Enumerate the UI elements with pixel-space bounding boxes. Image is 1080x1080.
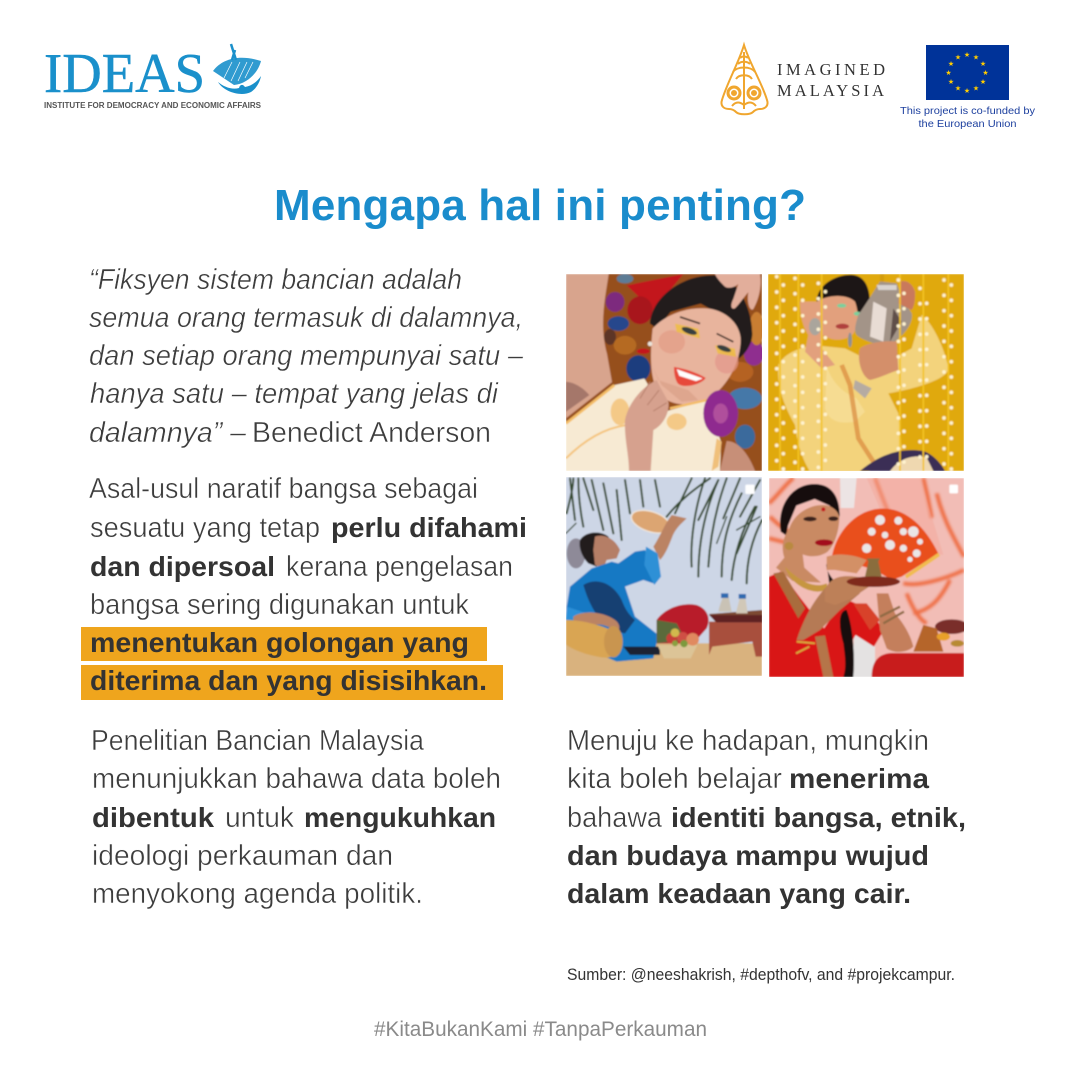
text block: national narrative: Asal-usul naratif bangsa sebagai — [89, 473, 478, 505]
neck and necklace — [785, 567, 827, 592]
text block: quote: semua orang termasuk di dalamnya, — [89, 302, 523, 334]
red sari — [769, 572, 884, 677]
skirt — [860, 450, 945, 471]
text block: census research: menyokong agenda politik. — [92, 878, 423, 910]
logo: Imagined Malaysia: MALAYSIA — [777, 81, 884, 100]
icon: EU stars: ★ — [980, 60, 986, 68]
icon: EU stars: ★ — [973, 84, 979, 92]
photo: woman in red with paper fan — [769, 478, 964, 677]
silver pot — [855, 282, 912, 345]
icon: EU stars: ★ — [980, 78, 986, 86]
icon: EU stars: ★ — [964, 87, 970, 95]
logo: EU flag with co-funding note — [900, 45, 1036, 130]
hand and lamp — [827, 554, 867, 573]
text block: national narrative — [81, 473, 527, 700]
flower in hair — [567, 538, 585, 568]
highlight: line one — [81, 627, 487, 661]
kebaya — [778, 315, 948, 472]
text block: census research: ideologi perkauman dan — [92, 840, 393, 872]
text block: census research: mengukuhkan — [304, 802, 496, 833]
hand on hair — [715, 274, 761, 310]
logo: Imagined Malaysia — [721, 45, 885, 114]
face — [776, 505, 839, 583]
icon: EU stars: ★ — [948, 60, 954, 68]
table and offerings — [872, 653, 964, 677]
icon: EU stars: ★ — [982, 69, 989, 77]
arm and hands — [859, 341, 898, 380]
photo: woman in blue with palm fronds — [566, 477, 762, 676]
icon: EU stars: ★ — [964, 51, 970, 59]
text block: moving forward: identiti bangsa, etnik, — [671, 802, 966, 833]
text block: quote: dalamnya” – — [89, 417, 247, 449]
photo: woman in cheongsam on batik — [566, 274, 762, 471]
text block: national narrative: dan dipersoal — [90, 551, 275, 582]
braid — [826, 563, 854, 677]
icon: EU stars — [945, 51, 989, 95]
text block: census research: untuk — [225, 802, 295, 834]
text block: national narrative: bangsa sering digunakan untuk — [90, 589, 470, 621]
hair — [650, 275, 752, 359]
text block: quote: dan setiap orang mempunyai satu – — [89, 340, 524, 372]
icon: EU stars: ★ — [955, 84, 961, 92]
text block: census research — [91, 725, 501, 910]
blue dress — [567, 550, 658, 662]
fruit basket — [657, 645, 697, 658]
text block: quote: Benedict Anderson — [252, 417, 491, 449]
batik cloth — [657, 604, 709, 643]
title: Mengapa hal ini penting? — [274, 181, 806, 230]
text block: census research: dibentuk — [92, 802, 214, 833]
text block: moving forward: kita boleh belajar — [567, 763, 782, 795]
hair and face — [580, 533, 612, 567]
icon: EU stars: ★ — [955, 54, 961, 62]
text block: census research: Penelitian Bancian Malaysia — [91, 725, 424, 757]
forearm — [573, 613, 619, 631]
logo: IDEAS: INSTITUTE FOR DEMOCRACY AND ECONOMIC AFFAIRS — [44, 101, 262, 110]
face and neck — [800, 296, 858, 368]
raised arm — [653, 515, 687, 560]
icon: EU stars: ★ — [945, 69, 952, 77]
palm fronds — [566, 478, 762, 583]
hair — [817, 275, 870, 332]
right forearm — [877, 593, 913, 652]
text block: moving forward: dan budaya mampu wujud — [567, 840, 929, 871]
text block: moving forward: menerima — [789, 763, 929, 794]
text block: moving forward: dalam keadaan yang cair. — [567, 878, 911, 909]
logo: Imagined Malaysia: IMAGINED — [777, 60, 885, 79]
hand fan — [629, 506, 673, 537]
icon: EU stars: ★ — [948, 78, 954, 86]
bamboo cushion — [566, 620, 623, 658]
text block: moving forward: Menuju ke hadapan, mungkin — [567, 725, 929, 757]
text block: quote: hanya satu – tempat yang jelas di — [90, 378, 499, 410]
icon: EU stars: ★ — [973, 54, 979, 62]
hashtags: #KitaBukanKami #TanpaPerkauman — [374, 1018, 707, 1041]
text block: census research: menunjukkan bahawa data boleh — [92, 763, 501, 795]
text block: national narrative: kerana pengelasan — [286, 551, 513, 583]
logo: IDEAS: IDEAS — [44, 43, 205, 105]
icon: IDEAS bird — [213, 44, 261, 94]
text block: moving forward: bahawa — [567, 802, 662, 834]
text block: quote — [89, 264, 524, 449]
text block: national narrative: menentukan golongan yang — [90, 627, 469, 658]
text block: national narrative: diterima dan yang disisihkan. — [90, 665, 487, 696]
hand on neck — [625, 380, 669, 471]
logo: EU flag with co-funding note: the European Union — [918, 118, 1017, 130]
icon: gold wayang leaf — [721, 45, 768, 114]
multi-image marker — [949, 485, 958, 493]
highlight: line two — [81, 665, 503, 700]
source note: Sumber: @neeshakrish, #depthofv, and #projekcampur. — [567, 965, 955, 984]
photo: woman in yellow kebaya with fairy lights — [768, 274, 964, 471]
multi-image marker — [745, 485, 755, 494]
text block: national narrative: sesuatu yang tetap — [90, 512, 320, 544]
forearm — [797, 580, 860, 640]
dress — [566, 378, 721, 471]
face — [651, 308, 741, 404]
text block: moving forward — [567, 725, 966, 909]
chest and bottles — [709, 610, 762, 623]
paper fan — [832, 509, 938, 580]
arm — [565, 274, 612, 419]
fairy light strands — [780, 274, 948, 471]
logo: EU flag with co-funding note: This project is co-funded by — [900, 105, 1036, 117]
text block: national narrative: perlu difahami — [331, 512, 527, 543]
hair — [780, 484, 840, 536]
purple flower — [703, 390, 738, 437]
text block: quote: “Fiksyen sistem bancian adalah — [89, 264, 462, 296]
